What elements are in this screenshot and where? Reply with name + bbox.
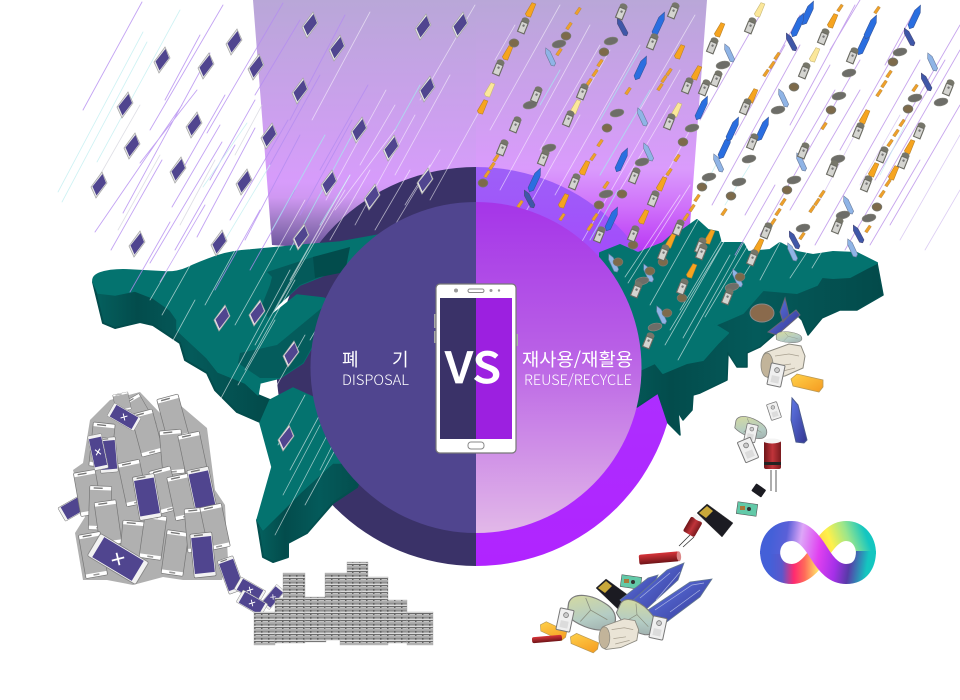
- rain: purple and pale streaks left side: [58, 2, 368, 292]
- outer comparison circle: [276, 167, 676, 566]
- label: disposal: 기: [392, 346, 409, 372]
- label: disposal: 폐: [342, 346, 359, 372]
- label: reuse and recycle: [522, 346, 633, 390]
- falling old phones: [91, 12, 468, 451]
- rain: white streaks inside beam and over left land: [150, 5, 695, 535]
- map: left landmass disposal side: [93, 232, 395, 562]
- rain: purple streaks right side: [700, 0, 960, 255]
- falling recycled materials: [477, 0, 955, 349]
- VS heading: VS: [444, 334, 501, 396]
- rain: white streaks over right land: [625, 185, 850, 360]
- city skyline of stacked phones: [254, 562, 433, 645]
- label: disposal: [342, 346, 409, 390]
- label: reuse and recycle: REUSE/RECYCLE: [524, 370, 632, 390]
- small capacitor: [679, 513, 704, 547]
- falling parts column below right land: [732, 298, 823, 465]
- background beam of falling items: [253, 0, 707, 260]
- central smartphone: [434, 284, 518, 453]
- green circuit board: [736, 502, 758, 516]
- map: right landmass reuse side: [600, 220, 883, 435]
- label: disposal: DISPOSAL: [342, 370, 409, 390]
- infinity rainbow symbol: [770, 531, 866, 574]
- small black chip: [751, 483, 766, 498]
- red cylinder: [639, 551, 682, 565]
- heap of recovered materials: [532, 563, 712, 653]
- inner circle disposal half: [310, 202, 476, 533]
- memory card: [697, 504, 733, 537]
- pile of discarded phones: [58, 392, 285, 616]
- capacitor large: [764, 438, 781, 492]
- inner circle reuse half: [476, 202, 642, 533]
- label: reuse and recycle: 재사용/재활용: [522, 346, 633, 372]
